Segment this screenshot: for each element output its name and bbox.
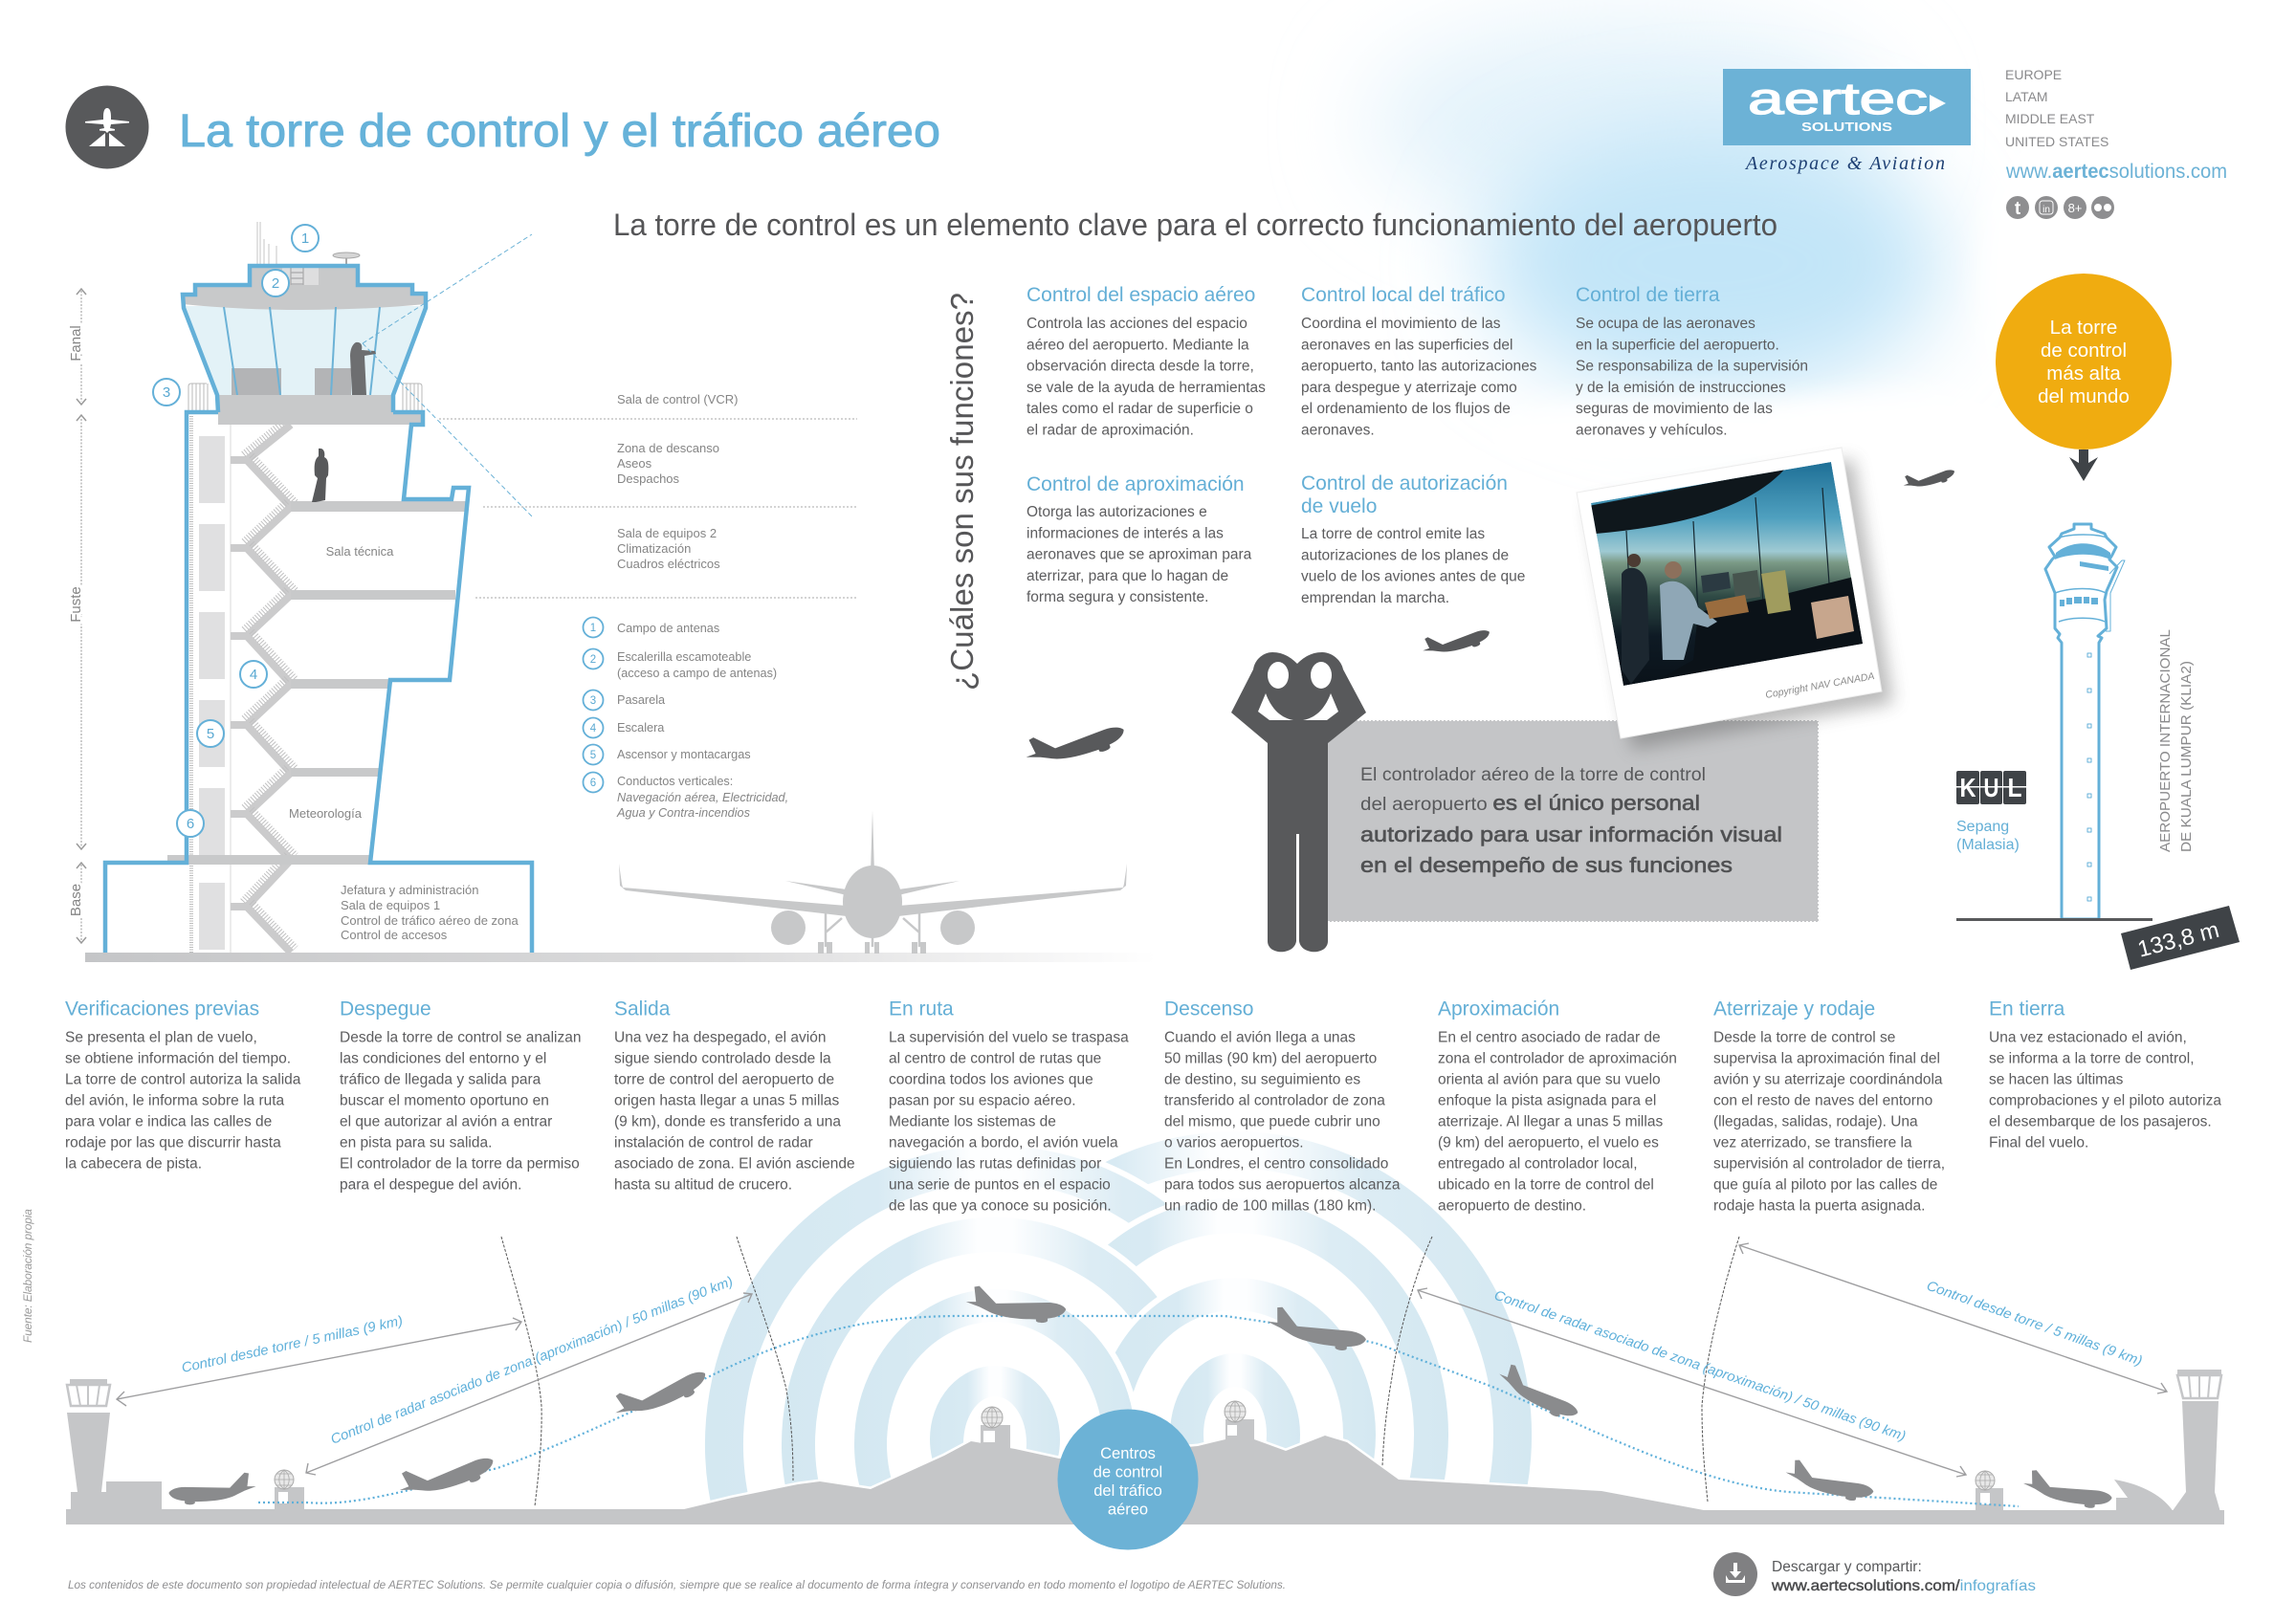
gray controller callout box — [1327, 720, 1819, 922]
phase: aterrizaje y rodaje: con el resto de naves del entorno — [1713, 1092, 1932, 1109]
floor dotted leaders — [439, 419, 857, 598]
panel: control local del tráfico: aeronaves. — [1301, 423, 1375, 438]
phase: en tierra: comprobaciones y el piloto autoriza — [1989, 1092, 2221, 1109]
phase: en tierra: Una vez estacionado el avión, — [1989, 1029, 2187, 1046]
aertec logo — [1723, 69, 1971, 174]
room labels: Despachos — [617, 472, 680, 486]
phase: descenso: para todos sus aeropuertos alcanza — [1164, 1176, 1401, 1194]
tower number callouts: 3 — [163, 384, 170, 401]
floors — [167, 412, 466, 865]
radar station right ground — [1976, 1471, 2003, 1511]
phase: salida: origen hasta llegar a unas 5 millas — [614, 1092, 839, 1109]
footer legal note: Los contenidos de este documento son propiedad intelectual de AERTEC Solutions. Se permite cualquier copia o difusión, siempre que se realice al documento de forma íntegra y conservando en todo momento el logotipo de AERTEC Solutions. — [68, 1578, 1286, 1591]
phase: aproximación: (9 km) del aeropuerto, el vuelo es — [1438, 1134, 1659, 1151]
phase: descenso: del mismo, que puede cubrir uno — [1164, 1113, 1380, 1130]
title: La torre de control y el tráfico aéreo — [179, 106, 940, 157]
panel: control del espacio aéreo: Control del espacio aéreo — [1027, 284, 1255, 306]
numbered legend: 1 — [590, 623, 596, 634]
ground bar — [85, 953, 1157, 962]
phase: salida: Una vez ha despegado, el avión — [614, 1029, 826, 1046]
tower number callouts: 5 — [207, 726, 214, 742]
phase: aterrizaje y rodaje: supervisión al controlador de tierra, — [1713, 1155, 1945, 1173]
panel: control de tierra: Control de tierra — [1576, 284, 1720, 306]
panel: control de tierra: aeronaves y vehículos. — [1576, 423, 1728, 438]
KUL airport code: U — [1984, 773, 1999, 802]
phase: aproximación: aeropuerto de destino. — [1438, 1197, 1586, 1215]
phase: en ruta: pasan por su espacio aéreo. — [889, 1092, 1076, 1109]
panel: control local del tráfico: Control local del tráfico — [1301, 284, 1506, 306]
phase: salida: hasta su altitud de crucero. — [614, 1176, 792, 1194]
zone boundary dashed curves — [501, 1237, 1739, 1506]
phase: en ruta: navegación a bordo, el avión vuela — [889, 1134, 1118, 1151]
panel: control de autorización de vuelo: emprendan la marcha. — [1301, 590, 1449, 606]
radar rings — [702, 1129, 1534, 1521]
room labels: Sala de equipos 1 — [341, 898, 440, 912]
polaroid photograph — [1577, 448, 1893, 750]
phase: descenso: de destino, su seguimiento es — [1164, 1071, 1360, 1088]
polaroid photograph: Copyright NAV CANADA — [1764, 670, 1875, 701]
phase: aterrizaje y rodaje: que guía al piloto por las calles de — [1713, 1176, 1937, 1194]
arrow down — [2069, 450, 2098, 481]
phase: despegue: las condiciones del entorno y el — [340, 1050, 546, 1067]
gray controller callout box: El controlador aéreo de la torre de control — [1360, 765, 1706, 785]
phase: despegue: Desde la torre de control se analizan — [340, 1029, 581, 1046]
numbered legend: 3 — [590, 695, 596, 707]
radar station hill one — [981, 1407, 1010, 1451]
gray controller callout box: autorizado para usar información visual — [1360, 822, 1782, 846]
numbered legend — [584, 618, 788, 820]
phase: despegue — [340, 998, 581, 1194]
aertec logo: Aerospace & Aviation — [1744, 153, 1945, 174]
aertec logo: SOLUTIONS — [1801, 120, 1892, 134]
subtitle: La torre de control es un elemento clave para el correcto funcionamiento del aeropuerto — [613, 208, 1777, 242]
room labels: Cuadros eléctricos — [617, 557, 720, 571]
panel: control de aproximación — [1027, 473, 1252, 605]
tower blue outline — [105, 266, 532, 953]
KLIA2 vertical label — [2157, 629, 2195, 852]
room labels: Climatización — [617, 541, 691, 556]
panel: control de tierra: Se ocupa de las aeronaves — [1576, 316, 1755, 332]
panel: control de aproximación: forma segura y consistente. — [1027, 589, 1208, 605]
ground line — [1956, 918, 2152, 921]
section labels with arrows — [77, 289, 86, 943]
phase: salida: asociado de zona. El avión asciende — [614, 1155, 855, 1173]
KLIA2 tower outline — [2045, 524, 2125, 919]
range label: radar right: Control de radar asociado de zona (aproximación) / 50 millas (90 km) — [1492, 1288, 1908, 1444]
room labels — [289, 392, 738, 942]
panel: control del espacio aéreo: el radar de aproximación. — [1027, 423, 1194, 438]
KLIA2 vertical label: AEROPUERTO INTERNACIONAL — [2157, 629, 2174, 852]
tower number callouts: 6 — [187, 816, 194, 832]
social icons: in — [2042, 205, 2050, 215]
gray controller callout box: del aeropuerto es el único personal — [1360, 791, 1700, 815]
phase: aterrizaje y rodaje: supervisa la aproximación final del — [1713, 1050, 1940, 1067]
phase: aterrizaje y rodaje: Aterrizaje y rodaje — [1713, 998, 1875, 1020]
phase: despegue: tráfico de llegada y salida para — [340, 1071, 541, 1088]
panel: control de aproximación: aterrizar, para que lo hagan de — [1027, 568, 1228, 584]
phase: salida: instalación de control de radar — [614, 1134, 813, 1151]
phase: en ruta: siguiendo las rutas definidas por — [889, 1155, 1101, 1173]
front view airplane — [619, 810, 1127, 954]
antennas and radar — [257, 222, 360, 266]
phase: verificaciones previas — [65, 998, 301, 1173]
phase: descenso: 50 millas (90 km) del aeropuerto — [1164, 1050, 1377, 1067]
phase: aproximación: En el centro asociado de radar de — [1438, 1029, 1661, 1046]
landscape ground and hills — [66, 1436, 2224, 1524]
phase: descenso: Descenso — [1164, 998, 1253, 1020]
phase: verificaciones previas: Verificaciones previas — [65, 998, 259, 1020]
person on floor — [312, 449, 328, 502]
yellow callout: tallest tower: de control — [2041, 340, 2127, 362]
room labels: Zona de descanso — [617, 441, 719, 455]
phase: despegue: El controlador de la torre da permiso — [340, 1155, 580, 1173]
flight path — [258, 1316, 2019, 1506]
range label: tower right: Control desde torre / 5 millas (9 km) — [1925, 1279, 2144, 1370]
phase: despegue: el que autorizar al avión a entrar — [340, 1113, 552, 1130]
radar station hill two — [1225, 1401, 1254, 1441]
phase: aproximación: enfoque la pista asignada para el — [1438, 1092, 1656, 1109]
elevator shaft blocks — [191, 416, 231, 953]
numbered legend: (acceso a campo de antenas) — [617, 667, 777, 680]
phase: salida: sigue siendo controlado desde la — [614, 1050, 831, 1067]
person in cab — [350, 342, 376, 395]
right tower silhouette — [2114, 1370, 2221, 1512]
phase: en ruta: al centro de control de rutas que — [889, 1050, 1101, 1067]
phase: descenso: transferido al controlador de zona — [1164, 1092, 1385, 1109]
phase: aproximación: entregado al controlador local, — [1438, 1155, 1638, 1173]
panel: control de aproximación: Control de aproximación — [1027, 473, 1245, 495]
phase: en tierra: el desembarque de los pasajeros. — [1989, 1113, 2212, 1130]
panel: control de tierra: Se responsabiliza de la supervisión — [1576, 359, 1808, 375]
controller figure with binoculars — [1231, 652, 1366, 952]
phase: aterrizaje y rodaje: vez aterrizado, se transfiere la — [1713, 1134, 1912, 1151]
numbered legend: 6 — [590, 778, 596, 789]
phase: verificaciones previas: del avión, le informa sobre la ruta — [65, 1092, 285, 1109]
KUL airport code: K — [1959, 773, 1976, 802]
phase: aterrizaje y rodaje — [1713, 998, 1945, 1215]
height tag: 133,8 m — [2135, 917, 2221, 963]
sight lines — [363, 234, 533, 517]
yellow callout: tallest tower — [1996, 274, 2172, 450]
flight planes — [168, 1286, 2114, 1510]
centers circle: del tráfico — [1093, 1482, 1162, 1500]
range arrows — [117, 1243, 2167, 1477]
label base: Base — [68, 884, 84, 916]
regions list: EUROPE — [2005, 67, 2062, 82]
yellow callout: tallest tower: más alta — [2046, 362, 2121, 384]
dark plane small — [1901, 459, 1956, 495]
phase: despegue: buscar el momento oportuno en — [340, 1092, 549, 1109]
panel: control del espacio aéreo: Controla las acciones del espacio — [1027, 316, 1247, 332]
yellow callout: tallest tower: del mundo — [2038, 385, 2130, 407]
download text: Descargar y compartir: — [1772, 1559, 1922, 1575]
section: tower cross-section — [105, 222, 533, 953]
phase: despegue: en pista para su salida. — [340, 1134, 492, 1151]
phase: salida: torre de control del aeropuerto de — [614, 1071, 834, 1088]
control cab — [183, 266, 426, 412]
panel: control de aproximación: informaciones de interés a las — [1027, 525, 1224, 541]
panel: control local del tráfico — [1301, 284, 1537, 438]
centers circle: de control — [1093, 1463, 1162, 1480]
phase: verificaciones previas: se obtiene información del tiempo. — [65, 1050, 291, 1067]
phase: salida — [614, 998, 855, 1194]
panel: control del espacio aéreo: observación directa desde la torre, — [1027, 359, 1254, 375]
regions list: MIDDLE EAST — [2005, 111, 2095, 126]
tower number callouts: 4 — [250, 667, 257, 683]
phase: salida: Salida — [614, 998, 671, 1020]
title icon: plane on runway — [65, 86, 149, 168]
phase: aterrizaje y rodaje: Desde la torre de control se — [1713, 1029, 1895, 1046]
panel: control local del tráfico: el ordenamiento de los flujos de — [1301, 401, 1511, 417]
phase: verificaciones previas: Se presenta el plan de vuelo, — [65, 1029, 257, 1046]
room labels: Sala de control (VCR) — [617, 392, 738, 406]
range label: tower left: Control desde torre / 5 millas (9 km) — [180, 1313, 405, 1376]
panel: control del espacio aéreo — [1027, 284, 1266, 438]
phase: descenso: o varios aeropuertos. — [1164, 1134, 1304, 1151]
phase: despegue: para el despegue del avión. — [340, 1176, 521, 1194]
phase: aterrizaje y rodaje: avión y su aterrizaje coordinándola — [1713, 1071, 1943, 1088]
phase: aproximación: ubicado en la torre de control del — [1438, 1176, 1654, 1194]
phase: en ruta: de las que ya conoce su posición. — [889, 1197, 1112, 1215]
phase: en ruta — [889, 998, 1129, 1215]
regions list: LATAM — [2005, 89, 2048, 104]
phase: en tierra — [1989, 998, 2221, 1151]
panel: control del espacio aéreo: se vale de la ayuda de herramientas — [1027, 380, 1266, 396]
phase: descenso — [1164, 998, 1401, 1215]
phase: despegue: Despegue — [340, 998, 431, 1020]
panel: control de aproximación: aeronaves que se aproximan para — [1027, 547, 1252, 563]
social icons — [2006, 196, 2114, 219]
phase: verificaciones previas: rodaje por las que discurrir hasta — [65, 1134, 281, 1151]
numbered legend: 2 — [590, 654, 596, 666]
website: www.aertecsolutions.com — [2005, 160, 2227, 183]
centers circle — [1058, 1410, 1198, 1549]
numbered legend: 5 — [590, 750, 596, 761]
panel: control del espacio aéreo: tales como el radar de superficie o — [1027, 401, 1253, 417]
gray controller callout box: en el desempeño de sus funciones — [1360, 853, 1733, 877]
numbered legend: Navegación aérea, Electricidad, — [617, 791, 788, 804]
phase: salida: (9 km), donde es transferido a una — [614, 1113, 841, 1130]
tower number callouts — [153, 225, 319, 837]
KUL airport code — [1956, 771, 2026, 804]
phase: en ruta: La supervisión del vuelo se traspasa — [889, 1029, 1129, 1046]
phase: descenso: Cuando el avión llega a unas — [1164, 1029, 1356, 1046]
centers circle: Centros — [1100, 1445, 1156, 1462]
phase: en tierra: se informa a la torre de control, — [1989, 1050, 2195, 1067]
numbered legend: 4 — [590, 723, 597, 735]
panel: control del espacio aéreo: aéreo del aeropuerto. Mediante la — [1027, 337, 1249, 353]
room labels: Sala técnica — [326, 544, 394, 559]
phase: en ruta: coordina todos los aviones que — [889, 1071, 1093, 1088]
panel: control de autorización de vuelo: Control de autorización — [1301, 472, 1508, 494]
aertec logo: aertec — [1748, 74, 1928, 123]
stairs — [231, 419, 296, 953]
download text: www.aertecsolutions.com/ infografías — [1771, 1578, 2036, 1594]
phase: aproximación: zona el controlador de aproximación — [1438, 1050, 1677, 1067]
panel: control de tierra — [1576, 284, 1808, 438]
phase: aterrizaje y rodaje: (llegadas, salidas, rodaje). Una — [1713, 1113, 1918, 1130]
label fuste: Fuste — [68, 586, 84, 623]
phase: verificaciones previas: La torre de control autoriza la salida — [65, 1071, 301, 1088]
numbered legend: Campo de antenas — [617, 622, 719, 635]
panel: control local del tráfico: aeronaves en las superficies del — [1301, 337, 1512, 353]
numbered legend: Pasarela — [617, 693, 666, 707]
label fanal: Fanal — [68, 325, 84, 362]
phase: aproximación — [1438, 998, 1677, 1215]
range label: radar left: Control de radar asociado de zona (aproximación) / 50 millas (90 km) — [329, 1274, 736, 1448]
numbered legend: Escalerilla escamoteable — [617, 650, 751, 664]
phase: verificaciones previas: para volar e indica las calles de — [65, 1113, 272, 1130]
panel: control de autorización de vuelo — [1301, 472, 1525, 606]
phase: en tierra: En tierra — [1989, 998, 2065, 1020]
tower number callouts: 1 — [301, 230, 309, 247]
phase: en ruta: En ruta — [889, 998, 954, 1020]
sky and cloud background — [1368, 19, 2095, 497]
numbered legend: Ascensor y montacargas — [617, 748, 751, 761]
room labels: Control de tráfico aéreo de zona — [341, 913, 519, 928]
centers circle: aéreo — [1108, 1502, 1148, 1519]
panel: control de tierra: y de la emisión de instrucciones — [1576, 380, 1786, 396]
phase: aterrizaje y rodaje: rodaje hasta la puerta asignada. — [1713, 1197, 1925, 1215]
KUL airport code: L — [2007, 773, 2022, 802]
phase: aproximación: orienta al avión para que su vuelo — [1438, 1071, 1661, 1088]
left tower silhouette — [67, 1379, 162, 1510]
phase: en tierra: Final del vuelo. — [1989, 1134, 2088, 1151]
panel: control local del tráfico: para despegue y aterrizaje como — [1301, 380, 1517, 396]
numbered legend: Agua y Contra-incendios — [616, 806, 751, 820]
panel: control de autorización de vuelo: La torre de control emite las — [1301, 526, 1485, 542]
phase: descenso: En Londres, el centro consolidado — [1164, 1155, 1388, 1173]
panel: control de tierra: seguras de movimiento de las — [1576, 401, 1773, 417]
height tag — [2121, 906, 2240, 970]
yellow callout: tallest tower: La torre — [2050, 317, 2117, 339]
download text — [1771, 1559, 2036, 1594]
panel: control de tierra: en la superficie del aeropuerto. — [1576, 337, 1779, 353]
phase: en ruta: Mediante los sistemas de — [889, 1113, 1056, 1130]
panel: control de autorización de vuelo: vuelo de los aviones antes de que — [1301, 569, 1525, 585]
rotated question heading: ¿Cuáles son sus funciones? — [945, 293, 981, 691]
regions list: UNITED STATES — [2005, 134, 2108, 149]
KUL location: (Malasia) — [1956, 837, 2020, 853]
panel: control local del tráfico: Coordina el movimiento de las — [1301, 316, 1501, 332]
download icon — [1713, 1552, 1757, 1596]
phase: verificaciones previas: la cabecera de pista. — [65, 1155, 202, 1173]
numbered legend: Conductos verticales: — [617, 775, 733, 788]
social icons: 8+ — [2068, 201, 2082, 215]
KLIA2 vertical label: DE KUALA LUMPUR (KLIA2) — [2178, 661, 2195, 852]
panel: control de autorización de vuelo: autorizaciones de los planes de — [1301, 547, 1509, 563]
radar station left ground — [275, 1470, 304, 1510]
panel: control de autorización de vuelo: de vuelo — [1301, 495, 1377, 517]
numbered legend: Escalera — [617, 721, 665, 735]
phase: aproximación: Aproximación — [1438, 998, 1559, 1020]
phase: en ruta: una serie de puntos en el espacio — [889, 1176, 1111, 1194]
phase: aproximación: aterrizaje. Al llegar a unas 5 millas — [1438, 1113, 1663, 1130]
KUL location: Sepang — [1956, 819, 2009, 835]
phase: descenso: un radio de 100 millas (180 km). — [1164, 1197, 1376, 1215]
room labels: Control de accesos — [341, 928, 448, 942]
room labels: Jefatura y administración — [341, 883, 479, 897]
room labels: Meteorología — [289, 806, 363, 821]
panel: control de aproximación: Otorga las autorizaciones e — [1027, 504, 1207, 520]
phase: en tierra: se hacen las últimas — [1989, 1071, 2124, 1088]
room labels: Aseos — [617, 456, 652, 471]
walkway hatch — [188, 384, 422, 410]
panel: control local del tráfico: aeropuerto, tanto las autorizaciones — [1301, 359, 1537, 375]
source note: Fuente: Elaboración propia — [21, 1209, 34, 1343]
dark plane medium — [1419, 617, 1492, 664]
dark plane large — [1021, 708, 1129, 777]
room labels: Sala de equipos 2 — [617, 526, 717, 540]
social icons: t — [2015, 199, 2021, 219]
tower number callouts: 2 — [272, 275, 279, 292]
